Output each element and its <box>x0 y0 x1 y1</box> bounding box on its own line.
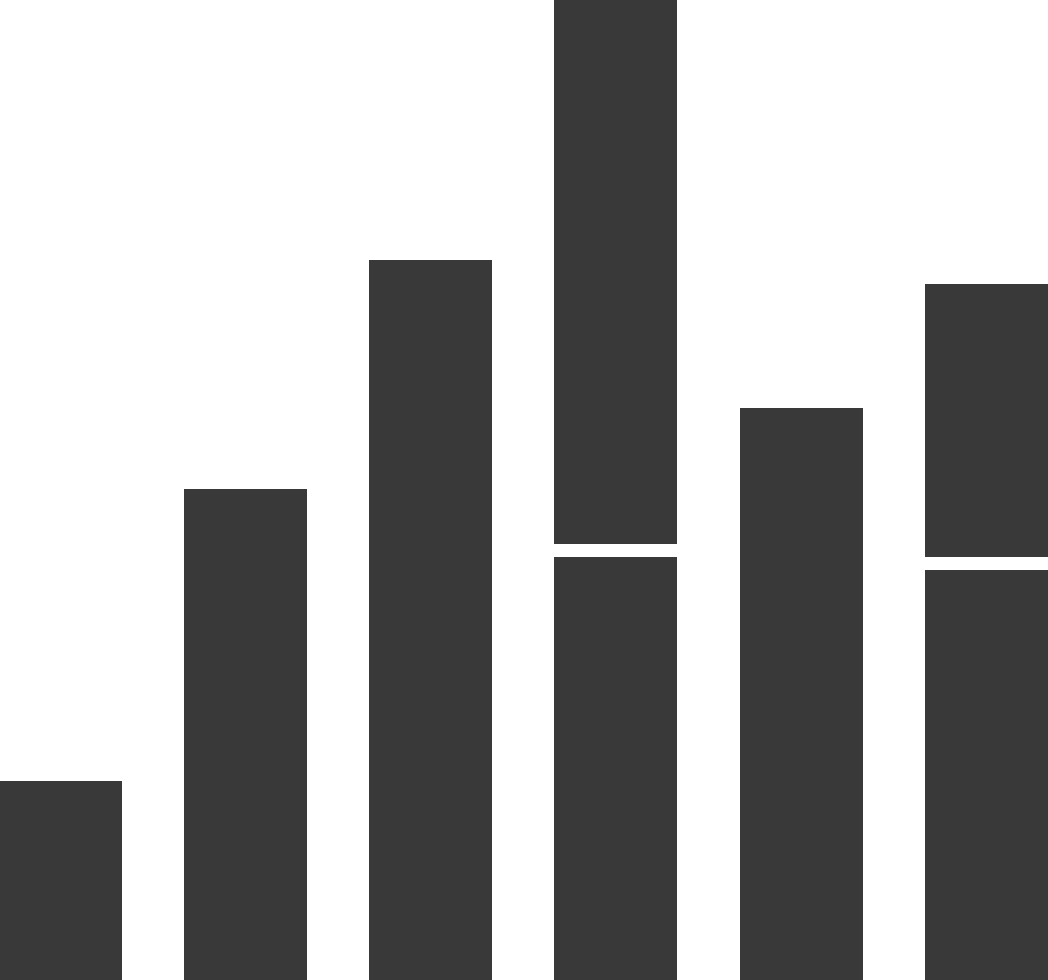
bar 6 <box>925 284 1048 980</box>
bar 3 <box>369 260 492 980</box>
bar 5 <box>740 408 863 980</box>
bar 2 <box>184 489 307 980</box>
bar 4 <box>554 0 677 980</box>
bar 1 <box>0 781 122 980</box>
